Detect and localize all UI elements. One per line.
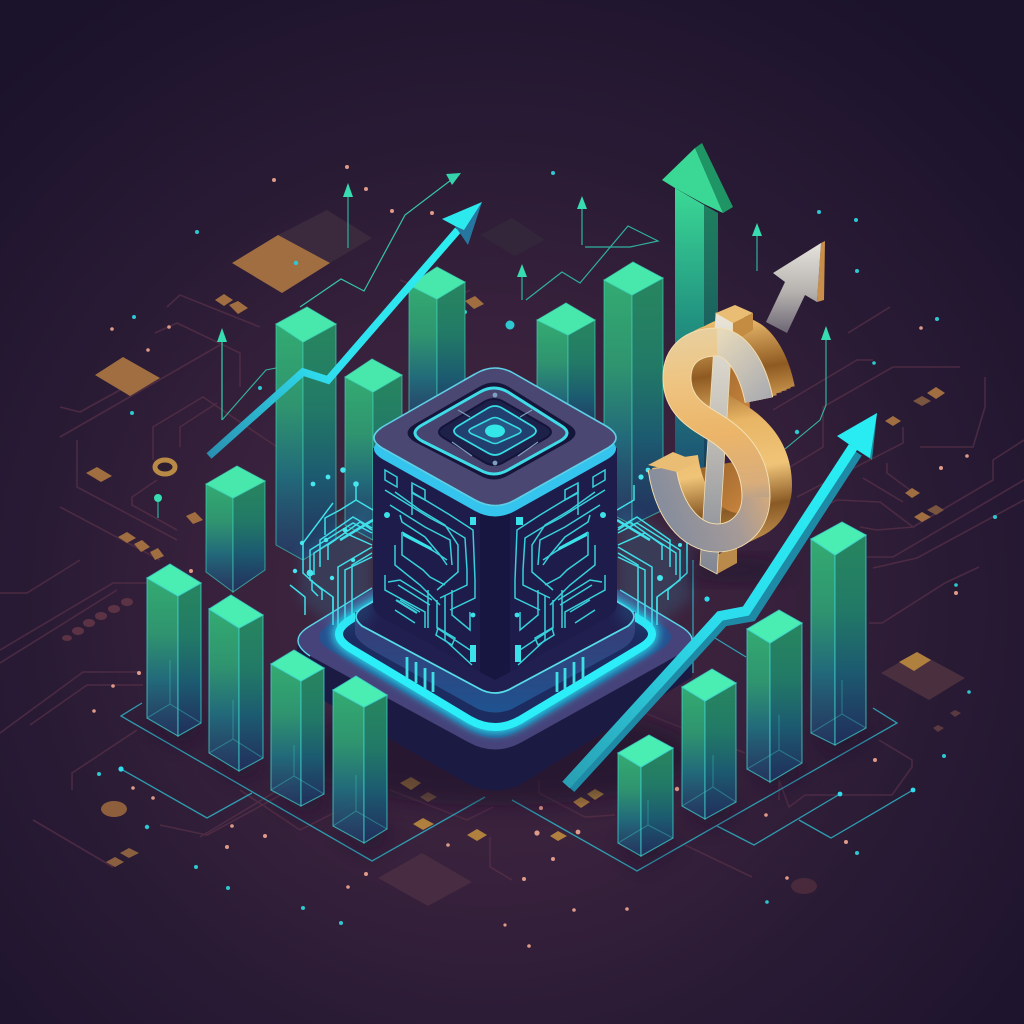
trend arrowhead top left [446, 173, 461, 185]
arrow shaft front [675, 188, 704, 490]
bar 1 [276, 307, 336, 560]
top inner ring [454, 406, 536, 455]
fringe glow right [618, 505, 690, 630]
glow ring [339, 530, 652, 727]
cube central edge [480, 512, 510, 680]
cube glow rim [374, 379, 616, 516]
gold ring node [155, 460, 175, 474]
bar 6 [206, 466, 265, 592]
circuit fringe right [617, 468, 692, 627]
dollar front outline [662, 342, 759, 538]
left cyan growth arrow [209, 202, 482, 456]
line end nodes [118, 596, 915, 796]
silver arrow edge [817, 241, 825, 302]
right face circuit [515, 470, 605, 665]
base lip [298, 518, 692, 750]
bar 10 [333, 676, 387, 843]
top ring dark [408, 382, 576, 480]
bar 2 [345, 359, 402, 540]
circuit fringe left [290, 467, 373, 627]
arrow shaft side [704, 205, 718, 470]
thin trend line top left [300, 177, 455, 307]
arrow head shade [455, 202, 482, 245]
background circuit traces [0, 280, 1024, 880]
bar 8 [209, 595, 263, 771]
bar 13 [747, 610, 802, 782]
top ring cyan [415, 388, 567, 474]
dollar hole lower [675, 460, 745, 528]
central AI cube [290, 368, 695, 805]
bar 11 [618, 735, 673, 856]
arrow head [442, 202, 482, 230]
dim via row [62, 598, 133, 641]
upper step top [356, 530, 634, 693]
silver arrow [766, 241, 825, 333]
left face modules [384, 512, 476, 662]
green up arrow [662, 143, 733, 490]
cube top face [374, 368, 616, 506]
arrow line [566, 447, 853, 785]
top core [485, 424, 505, 438]
dollar terminal top [648, 452, 698, 472]
arrow line shade [571, 453, 858, 789]
arrow line [209, 230, 458, 456]
dollar extrusion [666, 331, 781, 536]
dollar bottom arc sheen [662, 468, 756, 538]
arrow head shade [857, 413, 877, 460]
faint floor panels [278, 210, 965, 906]
thin floor outlines [121, 560, 913, 871]
left face circuit [385, 470, 475, 665]
bar 5 [604, 262, 663, 525]
dollar bar bottom side [717, 545, 737, 574]
back bars [206, 262, 663, 592]
base dark side [297, 640, 692, 790]
vent ticks right [557, 657, 583, 692]
dollar bar [700, 313, 733, 574]
right cyan growth arrow [566, 413, 877, 789]
scatter dots [92, 165, 997, 948]
cube body [373, 448, 617, 676]
fringe glow left [300, 505, 372, 630]
arrow head [837, 413, 877, 458]
bar shadows [150, 715, 872, 866]
bar 7 [147, 564, 201, 736]
base shadow [295, 705, 695, 805]
gold floor disc [101, 801, 127, 817]
bar 14 [811, 522, 866, 745]
dollar top arc sheen [717, 342, 759, 400]
vent ticks left [407, 657, 433, 692]
dollar front face [662, 342, 759, 538]
silver arrow body [766, 243, 821, 333]
dollar hole upper [690, 356, 750, 428]
arrow head side [695, 143, 733, 213]
upper step side [355, 612, 635, 712]
front right bars [618, 669, 736, 856]
top inner well [439, 399, 551, 465]
arrow head front [662, 148, 723, 213]
bar 3 [409, 267, 465, 430]
front bars [147, 522, 866, 843]
glow ring blur [339, 530, 652, 727]
bar 9 [271, 650, 324, 806]
dim floor disc [791, 878, 817, 894]
dollar bar top side [733, 313, 753, 342]
top pins [452, 393, 538, 465]
dollar sign [648, 305, 785, 582]
bar 4 [537, 303, 595, 440]
base top edge right [620, 590, 692, 654]
dollar bar top [716, 305, 753, 323]
right face modules [515, 512, 606, 662]
small up arrows [154, 183, 831, 518]
connector lines near left arrow and dollar [222, 368, 826, 449]
thin trend line top right [526, 226, 658, 300]
dollar shadow [685, 558, 785, 582]
top core ring [469, 418, 521, 444]
gold floor tiles [86, 235, 961, 867]
bar 12 [682, 669, 736, 819]
base top edge [298, 588, 372, 656]
blue inner ring [319, 525, 671, 738]
